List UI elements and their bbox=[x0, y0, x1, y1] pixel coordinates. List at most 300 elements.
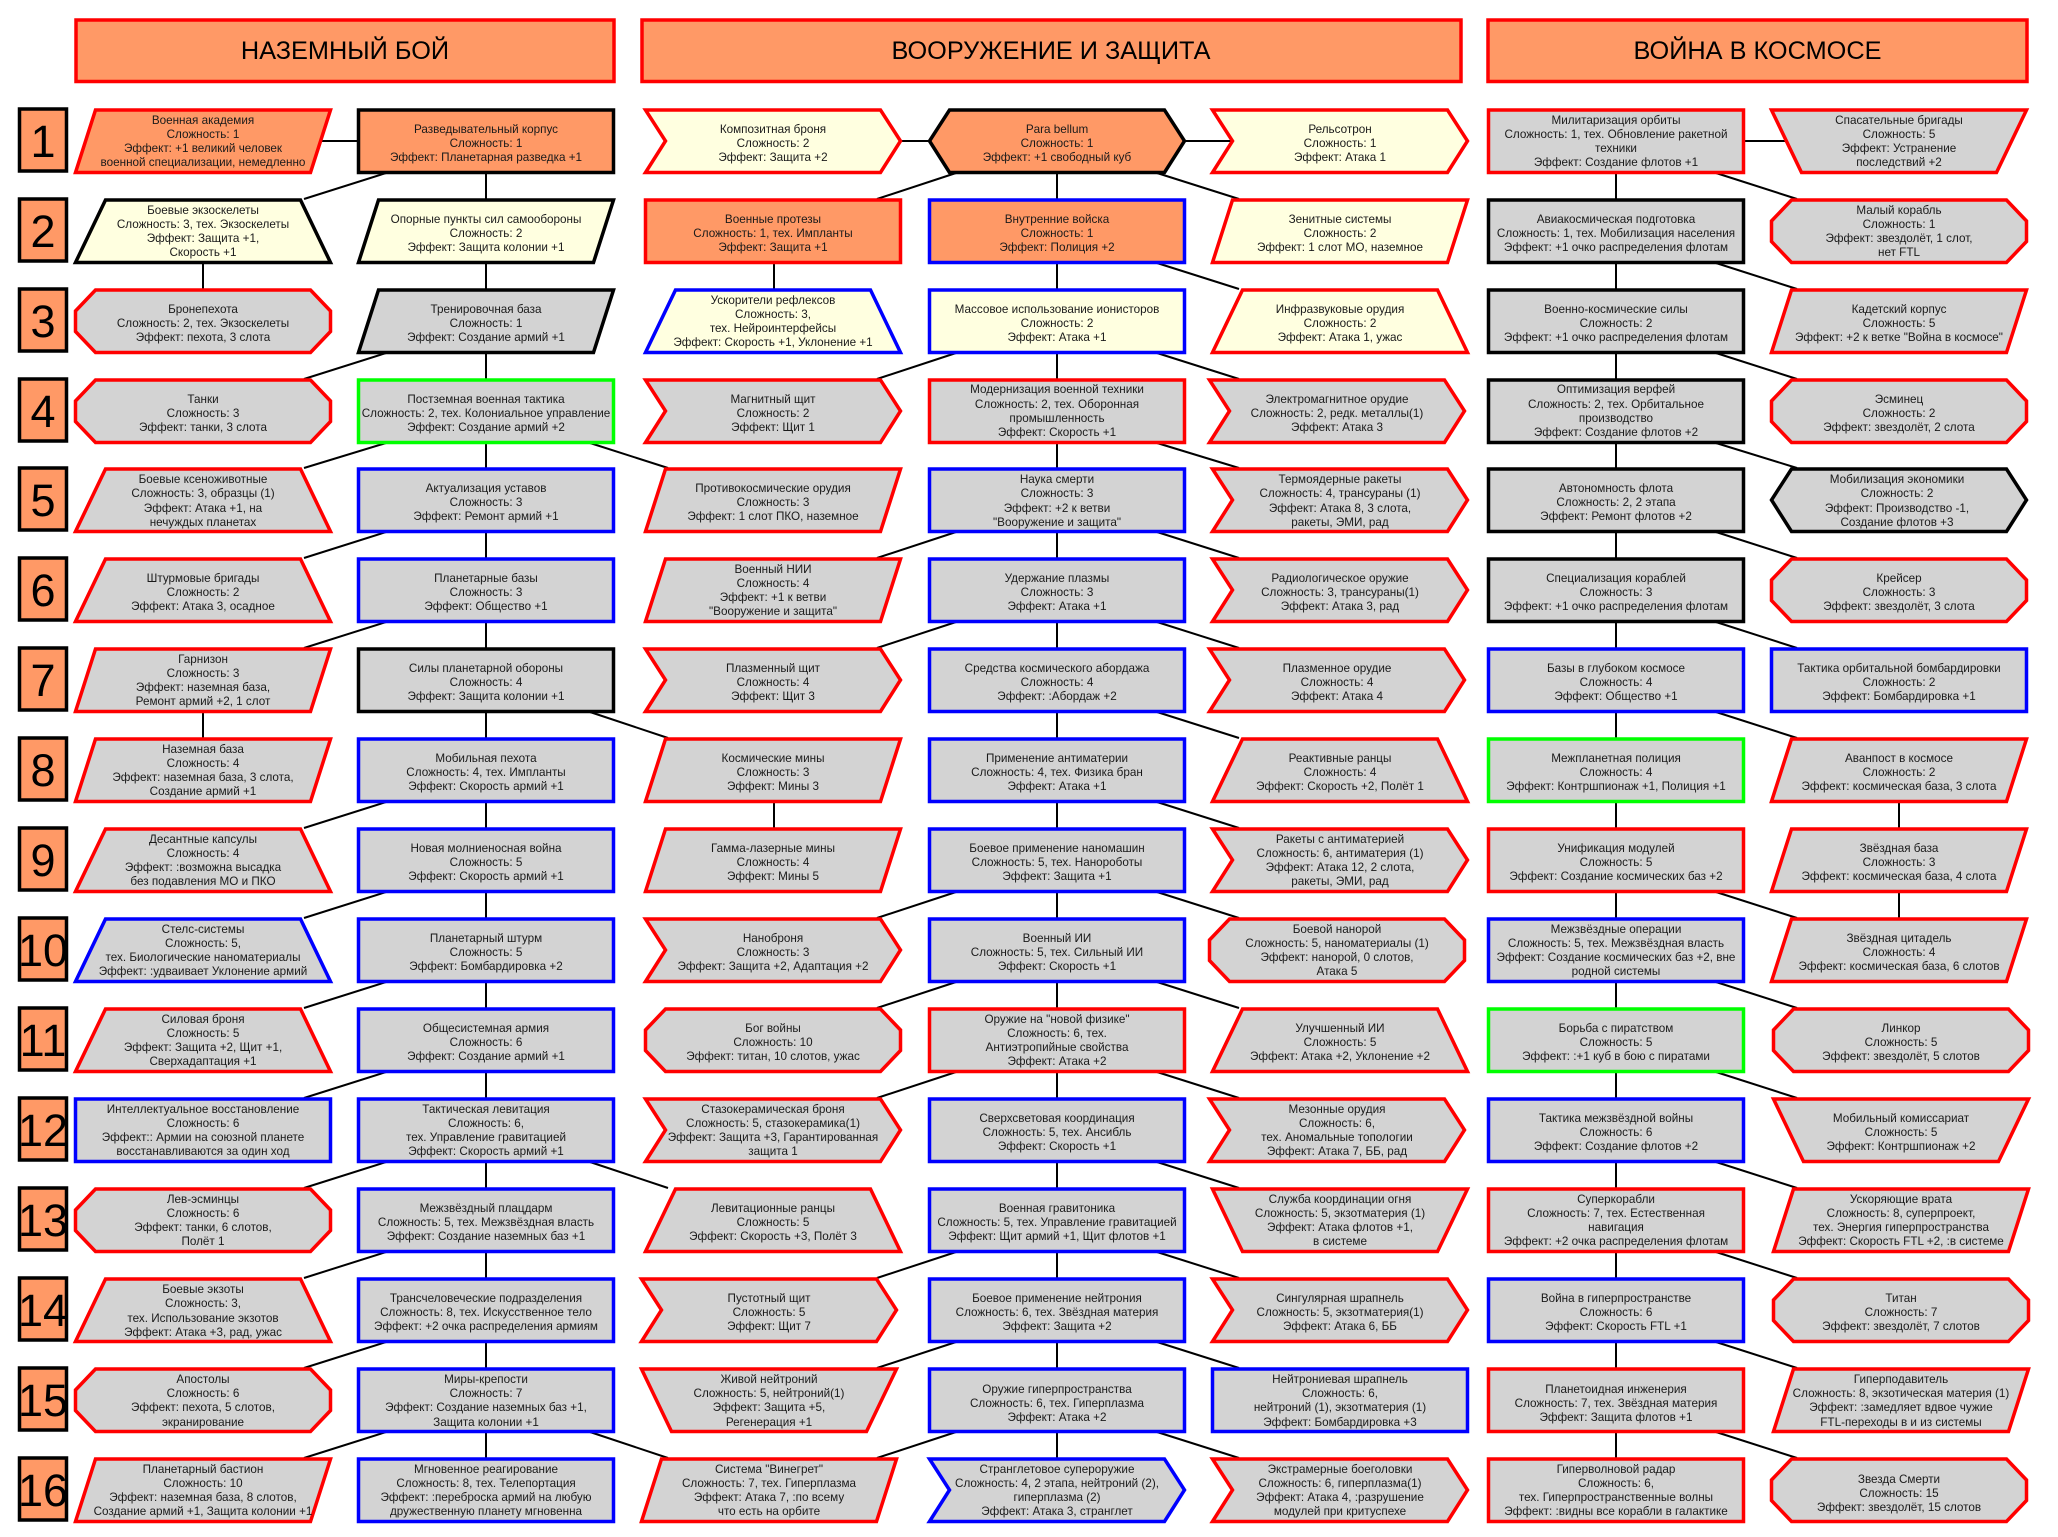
node: Сверхсветовая координация bbox=[930, 1099, 1184, 1162]
node: Мезонные орудия: Мезонные орудия bbox=[1289, 1103, 1385, 1116]
node: Инфразвуковые орудия bbox=[1212, 290, 1468, 352]
node: Рельсотрон bbox=[1212, 110, 1468, 172]
node: Интеллектуальное восстановление bbox=[76, 1099, 330, 1162]
node: Интеллектуальное восстановление: Сложность: 6 bbox=[167, 1117, 239, 1130]
node: Гиперволновой радар: тех. Гиперпространственные волны bbox=[1519, 1491, 1713, 1504]
node: Мобильная пехота: Сложность: 4, тех. Импланты bbox=[406, 766, 566, 779]
node: Электромагнитное орудие bbox=[1210, 380, 1464, 442]
node: Термоядерные ракеты bbox=[1212, 469, 1468, 532]
node: Служба координации огня: Эффект: Атака флотов +1, bbox=[1267, 1221, 1413, 1234]
node: Гиперволновой радар: Эффект: :видны все корабли в галактике bbox=[1504, 1505, 1728, 1518]
node: Внутренние войска bbox=[930, 200, 1184, 262]
node: Плазменное орудие: Плазменное орудие bbox=[1283, 662, 1391, 675]
node: Удержание плазмы bbox=[930, 559, 1184, 622]
node: Миры-крепости: Защита колонии +1 bbox=[433, 1416, 539, 1429]
node: Малый корабль: Сложность: 1 bbox=[1863, 218, 1935, 231]
heading: ground combat bbox=[76, 20, 614, 82]
node: Бронепехота bbox=[76, 290, 330, 352]
node: Модернизация военной техники: Модернизация военной техники bbox=[970, 383, 1144, 396]
node: Наноброня: Эффект: Защита +2, Адаптация +2 bbox=[677, 960, 869, 973]
node: Специализация кораблей bbox=[1488, 559, 1744, 622]
node: Десантные капсулы: Десантные капсулы bbox=[149, 833, 257, 846]
tier 5: 5 bbox=[30, 475, 56, 526]
node: Улучшенный ИИ: Эффект: Атака +2, Уклонение +2 bbox=[1250, 1050, 1430, 1063]
node: Военная академия bbox=[76, 110, 330, 172]
node: Зенитные системы: Эффект: 1 слот МО, наземное bbox=[1257, 241, 1423, 254]
node: Наноброня: Сложность: 3 bbox=[737, 946, 809, 959]
node: Планетарные базы bbox=[358, 559, 614, 622]
node: Межпланетная полиция bbox=[1488, 739, 1744, 802]
node: Para bellum: Эффект: +1 свободный куб bbox=[983, 151, 1132, 164]
tier 7 bbox=[20, 648, 66, 710]
node: Звёздная база: Сложность: 3 bbox=[1863, 856, 1935, 869]
node: Средства космического абордажа bbox=[930, 649, 1184, 712]
heading: weapons and defense bbox=[642, 20, 1461, 82]
node: Звезда Смерти: Эффект: звездолёт, 15 слотов bbox=[1817, 1501, 1981, 1514]
node: Разведывательный корпус bbox=[358, 110, 614, 172]
node: Гарнизон: Ремонт армий +2, 1 слот bbox=[136, 695, 271, 708]
node: Авиакосмическая подготовка: Сложность: 1, тех. Мобилизация населения bbox=[1497, 227, 1735, 240]
node: Эсминец: Эсминец bbox=[1875, 393, 1924, 406]
node: Композитная броня: Композитная броня bbox=[720, 123, 826, 136]
node: Массовое использование ионисторов: Массовое использование ионисторов bbox=[955, 303, 1159, 316]
node: Базы в глубоком космосе: Базы в глубоком космосе bbox=[1547, 662, 1685, 675]
panel: weapons and defense, main column bbox=[930, 110, 1184, 1522]
tier 11: 11 bbox=[20, 1015, 66, 1066]
node: Спасательные бригады: Сложность: 5 bbox=[1863, 128, 1936, 141]
node: Планетарный бастион bbox=[76, 1459, 330, 1522]
node: Система "Винегрет": что есть на орбите bbox=[718, 1505, 820, 1518]
node: Звёздная база bbox=[1772, 829, 2026, 892]
node: Наземная база: Сложность: 4 bbox=[167, 757, 240, 770]
node: Плазменный щит bbox=[646, 649, 900, 712]
node: Линкор: Линкор bbox=[1882, 1022, 1921, 1035]
node: Мобилизация экономики bbox=[1772, 469, 2026, 532]
node: Эсминец: Эффект: звездолёт, 2 слота bbox=[1823, 421, 1975, 434]
node: Ракеты с антиматерией: Ракеты с антиматерией bbox=[1276, 833, 1404, 846]
node: Экстрамерные боеголовки: Эффект: Атака 4, :разрушение bbox=[1256, 1491, 1424, 1504]
node: Пустотный щит: Пустотный щит bbox=[728, 1292, 811, 1305]
node: Военно-космические силы bbox=[1488, 290, 1744, 352]
node: Авиакосмическая подготовка: Авиакосмическая подготовка bbox=[1537, 213, 1696, 226]
node: Ускоряющие врата: Эффект: Скорость FTL +2, :в системе bbox=[1798, 1235, 2004, 1248]
node: Опорные пункты сил самообороны: Сложность: 2 bbox=[450, 227, 522, 240]
node: Боевые ксеноживотные: нечуждых планетах bbox=[150, 516, 256, 529]
node: Суперкорабли: навигация bbox=[1588, 1221, 1644, 1234]
node: Массовое использование ионисторов: Эффект: Атака +1 bbox=[1008, 331, 1106, 344]
node: Десантные капсулы: Эффект: :возможна высадка bbox=[125, 861, 282, 874]
node: Война в гиперпространстве: Эффект: Скорость FTL +1 bbox=[1545, 1320, 1687, 1333]
node: Пустотный щит: Эффект: Щит 7 bbox=[727, 1320, 811, 1333]
node: Плазменный щит: Плазменный щит bbox=[726, 662, 821, 675]
node: Плазменное орудие: Эффект: Атака 4 bbox=[1291, 690, 1384, 703]
node: Экстрамерные боеголовки: Экстрамерные боеголовки bbox=[1268, 1463, 1412, 1476]
node: Применение антиматерии: Сложность: 4, тех. Физика бран bbox=[971, 766, 1143, 779]
node: Эсминец: Сложность: 2 bbox=[1863, 407, 1935, 420]
node: Ускорители рефлексов bbox=[646, 290, 900, 352]
node: Применение антиматерии: Применение антиматерии bbox=[986, 752, 1128, 765]
node: Военная академия: Эффект: +1 великий человек bbox=[124, 142, 283, 155]
tier 1: 1 bbox=[30, 116, 56, 167]
node: Силы планетарной обороны: Эффект: Защита колонии +1 bbox=[408, 690, 564, 703]
node: Боевой нанорой: Сложность: 5, наноматериалы (1) bbox=[1245, 937, 1429, 950]
node: Титан bbox=[1774, 1279, 2028, 1342]
connectors between technology nodes bbox=[203, 141, 1899, 1458]
heading: weapons and defense: ВООРУЖЕНИЕ И ЗАЩИТА bbox=[891, 37, 1211, 65]
node: Стазокерамическая броня bbox=[646, 1099, 900, 1162]
node: Композитная броня: Эффект: Защита +2 bbox=[718, 151, 828, 164]
node: Противокосмические орудия: Противокосмические орудия bbox=[695, 482, 851, 495]
node: Мобильный комиссариат bbox=[1774, 1099, 2028, 1162]
node: Гиперподавитель: Сложность: 8, экзотическая материя (1) bbox=[1793, 1387, 2009, 1400]
node: Мгновенное реагирование: Эффект: :переброска армий на любую bbox=[380, 1491, 592, 1504]
node: Военная гравитоника: Военная гравитоника bbox=[999, 1202, 1116, 1215]
node: Боевое применение наномашин: Сложность: 5, тех. Нанороботы bbox=[972, 856, 1142, 869]
node: Гарнизон: Сложность: 3 bbox=[167, 667, 239, 680]
node: Разведывательный корпус: Эффект: Планетарная разведка +1 bbox=[390, 151, 582, 164]
node: Бог войны: Эффект: титан, 10 слотов, ужас bbox=[686, 1050, 860, 1063]
node: Боевые экзоскелеты: Боевые экзоскелеты bbox=[147, 204, 259, 217]
tier 16: 16 bbox=[18, 1465, 68, 1516]
node: Космические мины: Космические мины bbox=[722, 752, 824, 765]
node: Мезонные орудия: Эффект: Атака 7, ББ, рад bbox=[1267, 1145, 1407, 1158]
node: Милитаризация орбиты bbox=[1488, 110, 1744, 172]
node: Суперкорабли: Эффект: +2 очка распределения флотам bbox=[1504, 1235, 1728, 1248]
node: Композитная броня bbox=[646, 110, 900, 172]
node: Звезда Смерти: Сложность: 15 bbox=[1859, 1487, 1939, 1500]
node: Спасательные бригады: последствий +2 bbox=[1856, 156, 1942, 169]
node: Линкор: Сложность: 5 bbox=[1865, 1036, 1938, 1049]
node: Опорные пункты сил самообороны bbox=[358, 200, 614, 262]
node: Применение антиматерии bbox=[930, 739, 1184, 802]
node: Борьба с пиратством: Сложность: 5 bbox=[1580, 1036, 1653, 1049]
node: Война в гиперпространстве bbox=[1488, 1279, 1744, 1342]
node: Разведывательный корпус: Сложность: 1 bbox=[450, 137, 522, 150]
node: Служба координации огня: Служба координации огня bbox=[1269, 1193, 1411, 1206]
node: Планетарный бастион: Создание армий +1, Защита колонии +1 bbox=[94, 1505, 312, 1518]
node: Ракеты с антиматерией: Эффект: Атака 12, 2 слота, bbox=[1266, 861, 1414, 874]
node: Космические мины: Эффект: Мины 3 bbox=[727, 780, 819, 793]
node: Para bellum: Сложность: 1 bbox=[1021, 137, 1093, 150]
node: Реактивные ранцы: Эффект: Скорость +2, Полёт 1 bbox=[1256, 780, 1424, 793]
node: Тактика межзвёздной войны bbox=[1488, 1099, 1744, 1162]
node: Система "Винегрет": Сложность: 7, тех. Гиперплазма bbox=[682, 1477, 857, 1490]
node: Боевое применение нейтрония: Эффект: Защита +2 bbox=[1002, 1320, 1112, 1333]
node: Боевые экзоты bbox=[76, 1279, 330, 1342]
node: Экстрамерные боеголовки: Сложность: 6, гиперплазма(1) bbox=[1258, 1477, 1422, 1490]
node: Стазокерамическая броня: защита 1 bbox=[748, 1145, 798, 1158]
node: Межзвёздные операции: родной системы bbox=[1572, 965, 1660, 978]
node: Нейтрониевая шрапнель: Нейтрониевая шрапнель bbox=[1272, 1373, 1408, 1386]
node: Нейтрониевая шрапнель bbox=[1212, 1369, 1468, 1432]
node: Боевое применение наномашин bbox=[930, 829, 1184, 892]
node: Стелс-системы: Эффект: :удваивает Уклонение армий bbox=[99, 965, 307, 978]
node: Апостолы: Эффект: пехота, 5 слотов, bbox=[131, 1401, 275, 1414]
node: Наука смерти: "Вооружение и защита" bbox=[993, 516, 1121, 529]
node: Милитаризация орбиты: Сложность: 1, тех. Обновление ракетной bbox=[1504, 128, 1728, 141]
node: Мезонные орудия: Сложность: 6, bbox=[1299, 1117, 1375, 1130]
node: Радиологическое оружие: Эффект: Атака 3, рад bbox=[1281, 600, 1399, 613]
node: Стелс-системы: тех. Биологические наноматериалы bbox=[106, 951, 300, 964]
node: Интеллектуальное восстановление: Интеллектуальное восстановление bbox=[107, 1103, 299, 1116]
node: Межзвёздные операции: Межзвёздные операции bbox=[1551, 923, 1681, 936]
tier 2 bbox=[20, 199, 66, 261]
node: Планетарный штурм: Эффект: Бомбардировка +2 bbox=[409, 960, 563, 973]
node: Унификация модулей: Сложность: 5 bbox=[1580, 856, 1653, 869]
node: Танки: Эффект: танки, 3 слота bbox=[139, 421, 268, 434]
node: Живой нейтроний: Эффект: Защита +5, bbox=[713, 1401, 825, 1414]
heading: ground combat: НАЗЕМНЫЙ БОЙ bbox=[241, 35, 449, 65]
node: Сверхсветовая координация: Эффект: Скорость +1 bbox=[998, 1140, 1116, 1153]
node: Улучшенный ИИ: Улучшенный ИИ bbox=[1295, 1022, 1385, 1035]
node: Гиперподавитель: Эффект: :замедляет вдвое чужие bbox=[1809, 1401, 1993, 1414]
node: Бог войны bbox=[646, 1009, 900, 1072]
node: Оружие на "новой физике": Оружие на "новой физике" bbox=[984, 1013, 1130, 1026]
node: Радиологическое оружие: Сложность: 3, трансураны(1) bbox=[1261, 586, 1419, 599]
node: Средства космического абордажа: Сложность: 4 bbox=[1021, 676, 1094, 689]
node: Боевой нанорой bbox=[1210, 919, 1464, 982]
node: Военно-космические силы: Сложность: 2 bbox=[1580, 317, 1652, 330]
node: Военный ИИ: Эффект: Скорость +1 bbox=[998, 960, 1116, 973]
node: Стазокерамическая броня: Стазокерамическая броня bbox=[701, 1103, 845, 1116]
node: Оружие на "новой физике": Эффект: Атака +2 bbox=[1008, 1055, 1106, 1068]
node: Бог войны: Сложность: 10 bbox=[733, 1036, 813, 1049]
node: Крейсер: Эффект: звездолёт, 3 слота bbox=[1823, 600, 1975, 613]
node: Мобилизация экономики: Создание флотов +3 bbox=[1840, 516, 1954, 529]
node: Кадетский корпус: Сложность: 5 bbox=[1863, 317, 1936, 330]
node: Стелс-системы: Стелс-системы bbox=[162, 923, 244, 936]
tier 8: 8 bbox=[30, 745, 56, 796]
node: Странглетовое супероружие: Эффект: Атака 3, странглет bbox=[981, 1505, 1133, 1518]
node: Боевые экзоскелеты: Сложность: 3, тех. Экзоскелеты bbox=[117, 218, 289, 231]
node: Боевые экзоты: тех. Использование экзотов bbox=[127, 1312, 279, 1325]
node: Крейсер bbox=[1772, 559, 2026, 622]
node: Боевые ксеноживотные: Эффект: Атака +1, на bbox=[144, 502, 263, 515]
node: Удержание плазмы: Сложность: 3 bbox=[1021, 586, 1093, 599]
node: Планетарный бастион: Сложность: 10 bbox=[163, 1477, 243, 1490]
tier 9 bbox=[20, 828, 66, 890]
node: Экстрамерные боеголовки: модулей при критуспехе bbox=[1274, 1505, 1406, 1518]
node: Суперкорабли: Сложность: 7, тех. Естественная bbox=[1527, 1207, 1705, 1220]
node: Боевые ксеноживотные: Боевые ксеноживотные bbox=[139, 473, 267, 486]
node: Наука смерти: Сложность: 3 bbox=[1021, 487, 1093, 500]
node: Звёздная база: Звёздная база bbox=[1860, 842, 1939, 855]
node: Межзвёздный плацдарм: Сложность: 5, тех. Межзвёздная власть bbox=[378, 1216, 594, 1229]
node: Унификация модулей: Эффект: Создание космических баз +2 bbox=[1509, 870, 1723, 883]
node: Мобильный комиссариат: Сложность: 5 bbox=[1865, 1126, 1938, 1139]
node: Оптимизация верфей: Сложность: 2, тех. Орбитальное bbox=[1528, 398, 1704, 411]
node: Силовая броня: Эффект: Защита +2, Щит +1, bbox=[124, 1041, 282, 1054]
node: Военная академия: Военная академия bbox=[152, 114, 254, 127]
node: Наземная база: Эффект: наземная база, 3 слота, bbox=[112, 771, 294, 784]
tier 3: 3 bbox=[30, 296, 56, 347]
tier 13: 13 bbox=[18, 1195, 68, 1246]
panel: ground combat, main column bbox=[358, 110, 614, 1522]
node: Тактика межзвёздной войны: Тактика межзвёздной войны bbox=[1539, 1112, 1693, 1125]
node: Тактика межзвёздной войны: Сложность: 6 bbox=[1580, 1126, 1652, 1139]
node: Мобильная пехота bbox=[358, 739, 614, 802]
node: Силовая броня: Сверхадаптация +1 bbox=[149, 1055, 257, 1068]
node: Межпланетная полиция: Эффект: Контршпионаж +1, Полиция +1 bbox=[1506, 780, 1726, 793]
node: Наноброня: Наноброня bbox=[743, 932, 803, 945]
node: Апостолы: экранирование bbox=[162, 1416, 244, 1429]
node: Военные протезы: Эффект: Защита +1 bbox=[718, 241, 828, 254]
node: Ускоряющие врата: Ускоряющие врата bbox=[1850, 1193, 1953, 1206]
node: Массовое использование ионисторов: Сложность: 2 bbox=[1021, 317, 1093, 330]
node: Левитационные ранцы bbox=[646, 1189, 900, 1252]
node: Противокосмические орудия: Эффект: 1 слот ПКО, наземное bbox=[687, 510, 859, 523]
node: Наука смерти bbox=[930, 469, 1184, 532]
node: Военная академия: военной специализации, немедленно bbox=[101, 156, 306, 169]
node: Космические мины: Сложность: 3 bbox=[737, 766, 809, 779]
node: Наземная база: Наземная база bbox=[162, 743, 244, 756]
node: Система "Винегрет" bbox=[642, 1459, 896, 1522]
node: Унификация модулей bbox=[1488, 829, 1744, 892]
node: Апостолы bbox=[76, 1369, 330, 1432]
node: Лев-эсминцы: Сложность: 6 bbox=[167, 1207, 239, 1220]
node: Тренировочная база bbox=[358, 290, 614, 352]
node: Гамма-лазерные мины bbox=[646, 829, 900, 892]
node: Служба координации огня: Сложность: 5, экзотматерия (1) bbox=[1255, 1207, 1425, 1220]
node: Служба координации огня: в системе bbox=[1313, 1235, 1367, 1248]
node: Штурмовые бригады: Эффект: Атака 3, осадное bbox=[131, 600, 275, 613]
node: Аванпост в космосе: Сложность: 2 bbox=[1863, 766, 1935, 779]
node: Борьба с пиратством bbox=[1488, 1009, 1744, 1072]
node: Инфразвуковые орудия: Сложность: 2 bbox=[1304, 317, 1376, 330]
node: Планетарный бастион: Планетарный бастион bbox=[143, 1463, 263, 1476]
node: Удержание плазмы: Эффект: Атака +1 bbox=[1008, 600, 1106, 613]
node: Мгновенное реагирование: дружественную планету мгновенна bbox=[390, 1505, 583, 1518]
node: Военные протезы bbox=[646, 200, 900, 262]
node: Ускорители рефлексов: Ускорители рефлексов bbox=[711, 294, 835, 307]
node: Лев-эсминцы: Эффект: танки, 6 слотов, bbox=[134, 1221, 272, 1234]
node: Танки bbox=[76, 380, 330, 442]
node: Ускорители рефлексов: Сложность: 3, bbox=[735, 308, 811, 321]
tier 8 bbox=[20, 738, 66, 800]
node: Рельсотрон: Эффект: Атака 1 bbox=[1294, 151, 1386, 164]
node: Автономность флота: Сложность: 2, 2 этапа bbox=[1556, 496, 1676, 509]
node: Композитная броня: Сложность: 2 bbox=[737, 137, 809, 150]
node: Тактическая левитация bbox=[358, 1099, 614, 1162]
node: Десантные капсулы: без подавления МО и ПКО bbox=[130, 875, 276, 888]
node: Странглетовое супероружие: Странглетовое супероружие bbox=[980, 1463, 1134, 1476]
node: Странглетовое супероружие: гиперплазма (2) bbox=[1013, 1491, 1101, 1504]
node: Электромагнитное орудие: Эффект: Атака 3 bbox=[1291, 421, 1383, 434]
node: Боевые ксеноживотные: Сложность: 3, образцы (1) bbox=[131, 487, 275, 500]
node: Аванпост в космосе bbox=[1772, 739, 2026, 802]
node: Штурмовые бригады bbox=[76, 559, 330, 622]
node: Трансчеловеческие подразделения: Сложность: 8, тех. Искусственное тело bbox=[380, 1306, 592, 1319]
node: Суперкорабли bbox=[1488, 1189, 1744, 1252]
node: Военный ИИ: Военный ИИ bbox=[1023, 932, 1091, 945]
node: Ускоряющие врата: тех. Энергия гиперпространства bbox=[1813, 1221, 1989, 1234]
node: Улучшенный ИИ bbox=[1212, 1009, 1468, 1072]
node: Para bellum bbox=[930, 110, 1184, 172]
node: Ускорители рефлексов: тех. Нейроинтерфейсы bbox=[710, 322, 836, 335]
node: Оптимизация верфей: Эффект: Создание флотов +2 bbox=[1534, 426, 1698, 439]
node: Плазменное орудие bbox=[1210, 649, 1464, 712]
node: Война в гиперпространстве: Война в гиперпространстве bbox=[1541, 1292, 1691, 1305]
node: Левитационные ранцы: Левитационные ранцы bbox=[711, 1202, 835, 1215]
node: Тактическая левитация: тех. Управление гравитацией bbox=[406, 1131, 566, 1144]
node: Крейсер: Крейсер bbox=[1876, 572, 1922, 585]
node: Модернизация военной техники: промышленность bbox=[1009, 412, 1105, 425]
node: Военный ИИ: Сложность: 5, тех. Сильный ИИ bbox=[971, 946, 1143, 959]
node: Борьба с пиратством: Эффект: :+1 куб в бою с пиратами bbox=[1522, 1050, 1710, 1063]
node: Внутренние войска: Внутренние войска bbox=[1005, 213, 1110, 226]
node: Танки: Танки bbox=[187, 393, 219, 406]
node: Улучшенный ИИ: Сложность: 5 bbox=[1304, 1036, 1377, 1049]
node: Гамма-лазерные мины: Сложность: 4 bbox=[737, 856, 810, 869]
node: Рельсотрон: Сложность: 1 bbox=[1304, 137, 1376, 150]
node: Гиперволновой радар: Гиперволновой радар bbox=[1557, 1463, 1676, 1476]
node: Тактика орбитальной бомбардировки: Тактика орбитальной бомбардировки bbox=[1797, 662, 2001, 675]
node: Аванпост в космосе: Аванпост в космосе bbox=[1845, 752, 1953, 765]
node: Боевой нанорой: Эффект: нанорой, 0 слотов, bbox=[1260, 951, 1414, 964]
node: Сингулярная шрапнель bbox=[1212, 1279, 1468, 1342]
node: Пустотный щит: Сложность: 5 bbox=[733, 1306, 806, 1319]
node: Военный НИИ: Военный НИИ bbox=[734, 563, 812, 576]
node: Лев-эсминцы bbox=[76, 1189, 330, 1252]
node: Система "Винегрет": Эффект: Атака 7, :по всему bbox=[694, 1491, 844, 1504]
node: Постземная военная тактика bbox=[358, 380, 614, 442]
node: Мобильный комиссариат: Эффект: Контршпионаж +2 bbox=[1827, 1140, 1975, 1153]
node: Средства космического абордажа: Средства космического абордажа bbox=[965, 662, 1150, 675]
node: Левитационные ранцы: Эффект: Скорость +3, Полёт 3 bbox=[689, 1230, 857, 1243]
node: Звёздная цитадель bbox=[1772, 919, 2026, 982]
node: Гамма-лазерные мины: Эффект: Мины 5 bbox=[727, 870, 820, 883]
node: Ракеты с антиматерией: Сложность: 6, антиматерия (1) bbox=[1256, 847, 1424, 860]
node: Постземная военная тактика: Постземная военная тактика bbox=[407, 393, 565, 406]
node: Планетоидная инженерия: Эффект: Защита флотов +1 bbox=[1540, 1411, 1692, 1424]
node: Милитаризация орбиты: техники bbox=[1595, 142, 1637, 155]
node: Апостолы: Апостолы bbox=[176, 1373, 230, 1386]
node: Оружие гиперпространства bbox=[930, 1369, 1184, 1432]
node: Боевые экзоты: Эффект: Атака +3, рад, ужас bbox=[124, 1326, 282, 1339]
node: Военная гравитоника: Сложность: 5, тех. Управление гравитацией bbox=[937, 1216, 1177, 1229]
node: Военный НИИ bbox=[646, 559, 900, 622]
node: Тактическая левитация: Сложность: 6, bbox=[448, 1117, 524, 1130]
node: Танки: Сложность: 3 bbox=[167, 407, 239, 420]
node: Планетоидная инженерия bbox=[1488, 1369, 1744, 1432]
node: Нейтрониевая шрапнель: Сложность: 6, bbox=[1302, 1387, 1378, 1400]
node: Зенитные системы bbox=[1212, 200, 1468, 262]
tier 5 bbox=[20, 468, 66, 530]
node: Живой нейтроний bbox=[642, 1369, 896, 1432]
node: Военно-космические силы: Военно-космические силы bbox=[1544, 303, 1688, 316]
node: Нейтрониевая шрапнель: нейтроний (1), экзотматерия (1) bbox=[1254, 1401, 1426, 1414]
node: Магнитный щит: Эффект: Щит 1 bbox=[731, 421, 815, 434]
node: Служба координации огня bbox=[1212, 1189, 1468, 1252]
node: Военный НИИ: Сложность: 4 bbox=[737, 577, 810, 590]
node: Наука смерти: Эффект: +2 к ветви bbox=[1004, 502, 1110, 515]
node: Интеллектуальное восстановление: восстанавливаются за один ход bbox=[116, 1145, 290, 1158]
node: Оптимизация верфей bbox=[1488, 380, 1744, 442]
node: Планетарный бастион: Эффект: наземная база, 8 слотов, bbox=[109, 1491, 297, 1504]
node: Титан: Эффект: звездолёт, 7 слотов bbox=[1822, 1320, 1980, 1333]
node: Реактивные ранцы: Сложность: 4 bbox=[1304, 766, 1377, 779]
node: Постземная военная тактика: Эффект: Создание армий +2 bbox=[407, 421, 565, 434]
panel: space warfare, main column bbox=[1488, 110, 1744, 1522]
node: Стазокерамическая броня: Сложность: 5, стазокерамика(1) bbox=[686, 1117, 860, 1130]
node: Мобилизация экономики: Мобилизация экономики bbox=[1830, 473, 1964, 486]
node: Странглетовое супероружие: Сложность: 4, 2 этапа, нейтроний (2), bbox=[955, 1477, 1159, 1490]
node: Звёздная цитадель: Эффект: космическая база, 6 слотов bbox=[1798, 960, 2000, 973]
node: Линкор: Эффект: звездолёт, 5 слотов bbox=[1822, 1050, 1980, 1063]
node: Космические мины bbox=[646, 739, 900, 802]
node: Боевое применение наномашин: Боевое применение наномашин bbox=[969, 842, 1145, 855]
node: Новая молниеносная война: Сложность: 5 bbox=[450, 856, 523, 869]
